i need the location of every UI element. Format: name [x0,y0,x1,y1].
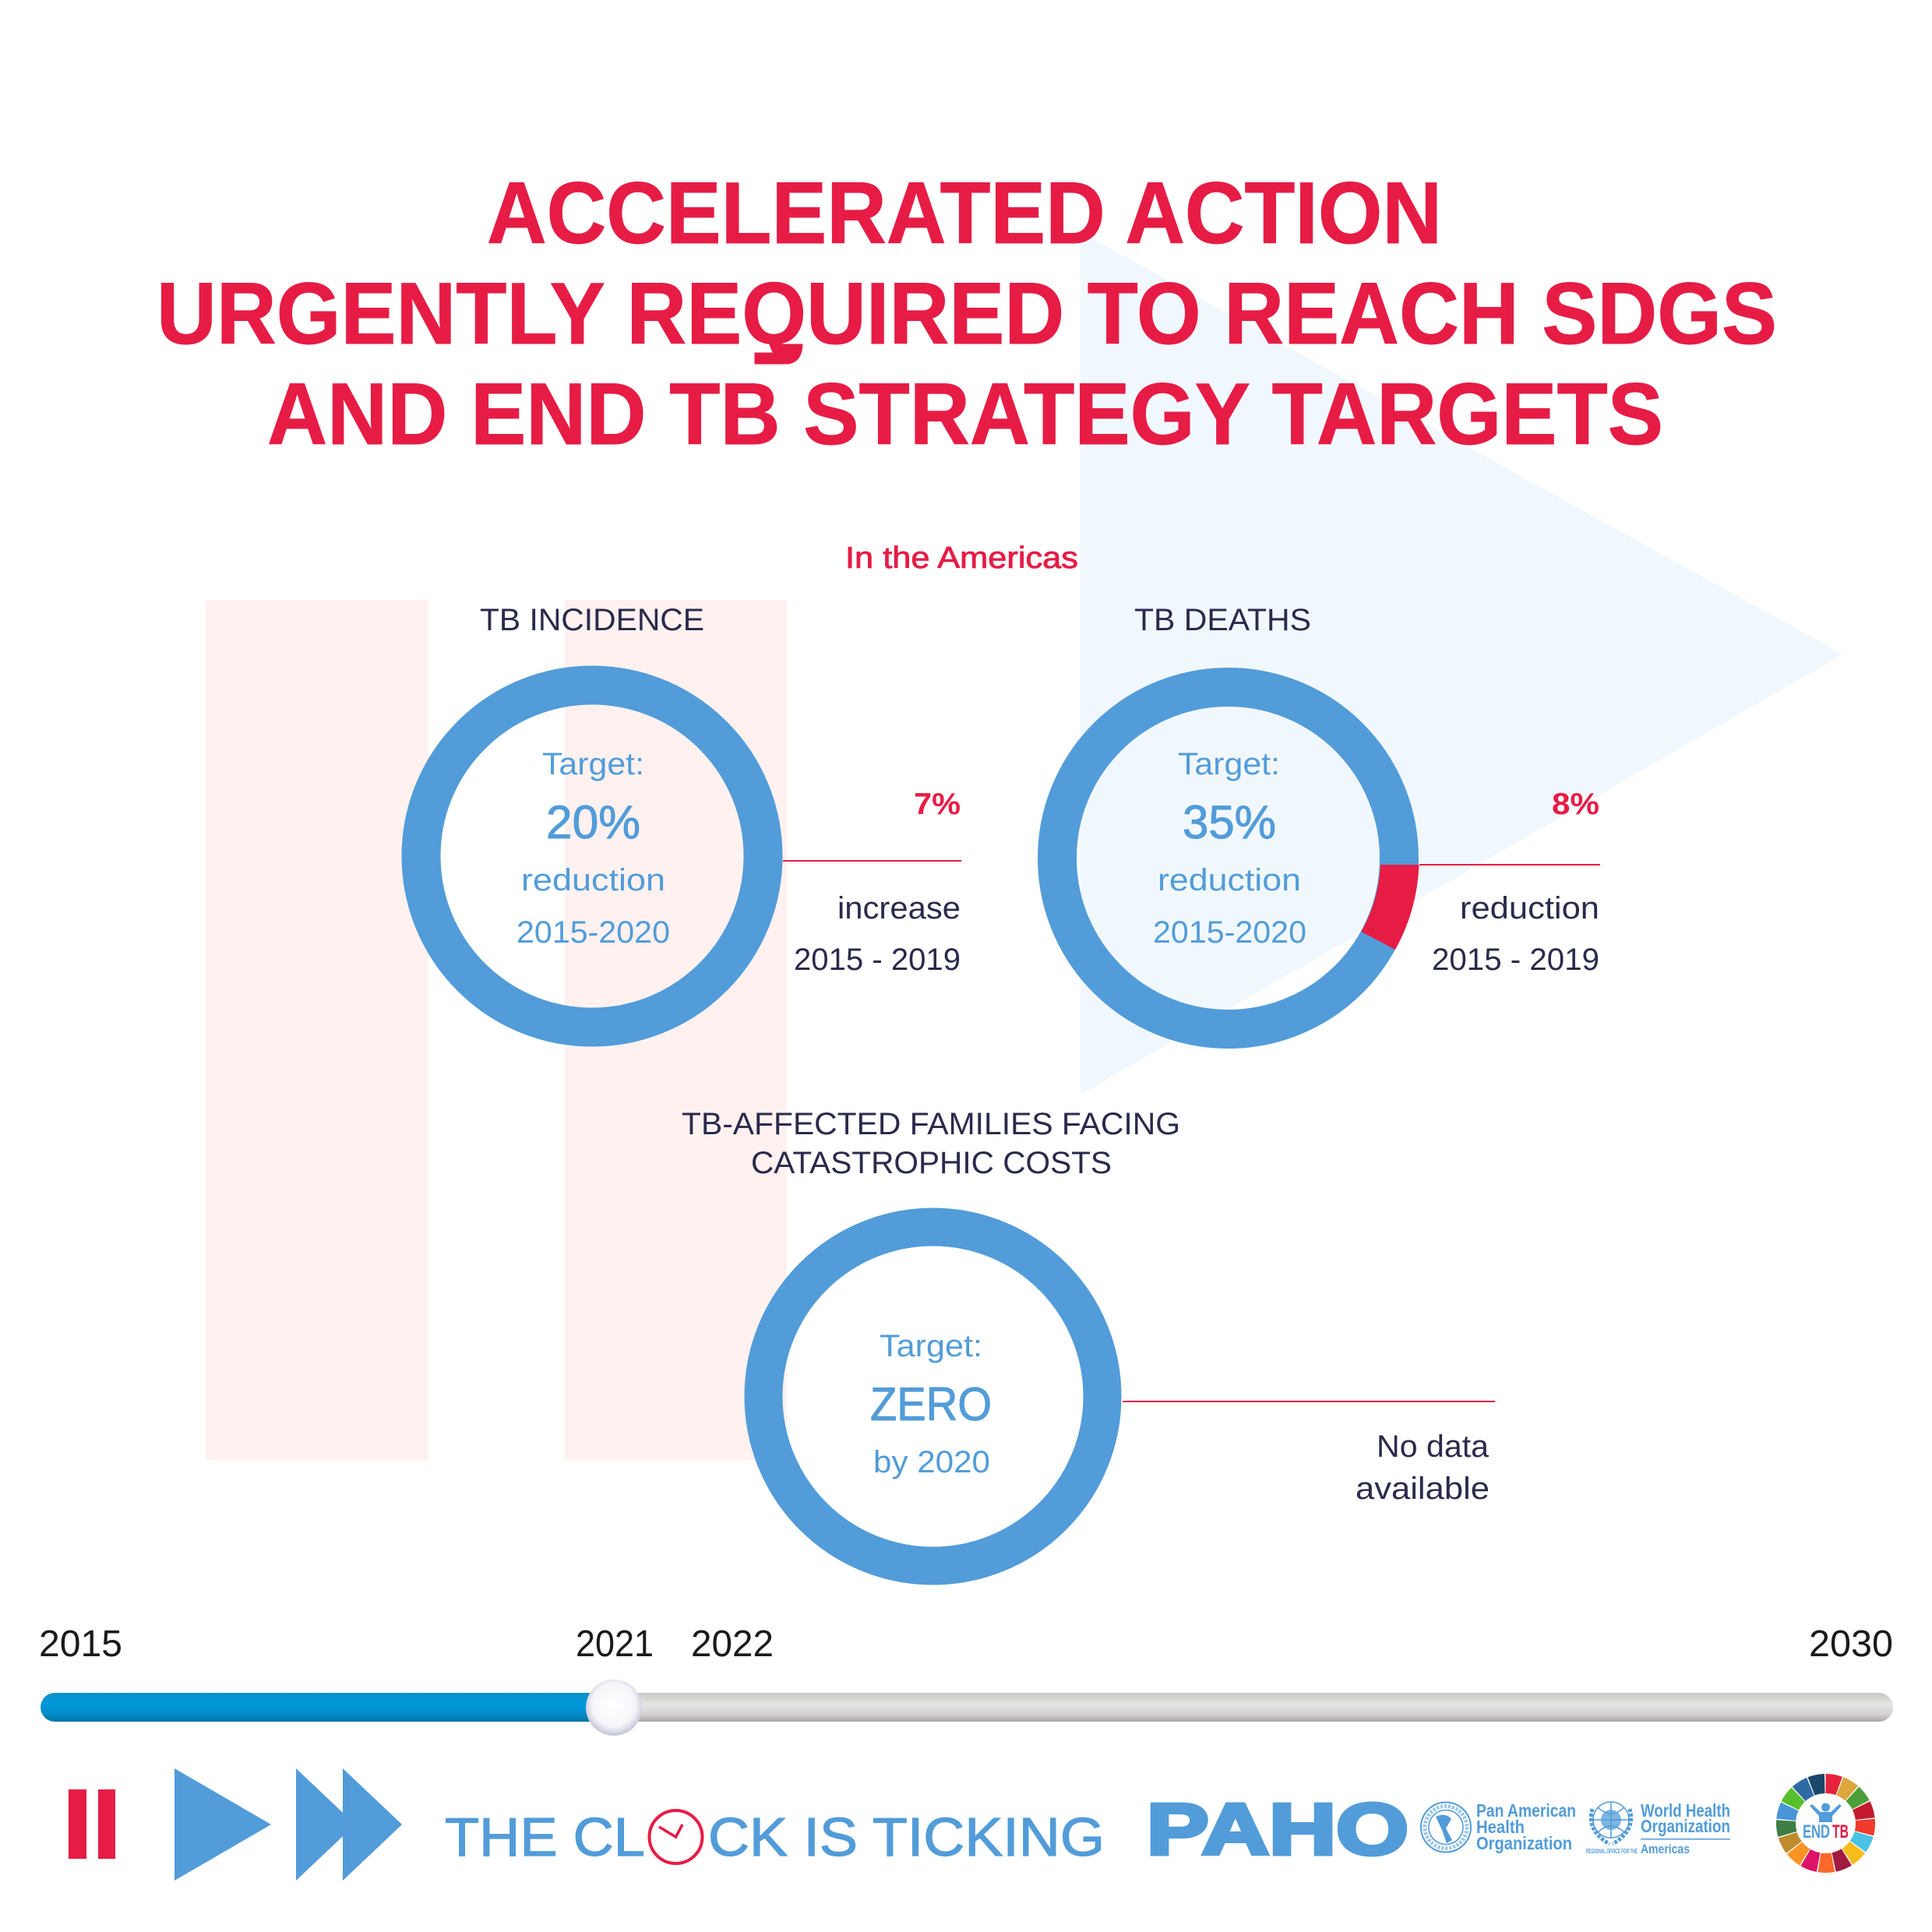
logo: PAHO emblem [1421,1803,1471,1853]
logo text: Pan American Health Organization: Organization [1476,1833,1572,1853]
target text: zero by 2020: by 2020 [873,1445,990,1479]
callout value: 8% reduction: 8% [1552,788,1599,821]
donut segment: 8% achieved [1361,865,1419,950]
logo: End TB wheel [1769,1767,1882,1880]
slogan: the clock is ticking: CK IS TICKING [708,1807,1105,1867]
callout value: 7% increase: increase [837,891,961,925]
target text: zero by 2020 [870,1329,992,1479]
target text: 20% reduction: reduction [521,863,665,897]
callout line: incidence [783,860,961,862]
target text: 35% reduction: Target: [1178,747,1280,781]
panel: TB deaths [1057,603,1600,1029]
heading: TB-affected families [682,1107,1180,1180]
callout line: costs [1123,1401,1495,1402]
callout value: 8% reduction: reduction [1460,891,1599,925]
target text: 35% reduction: 35% [1183,796,1276,848]
panel: catastrophic costs [682,1107,1495,1566]
icon: play [175,1768,271,1881]
target text: 35% reduction [1153,747,1306,950]
callout text: no data available: No data [1377,1430,1490,1464]
wordmark: END TB: TB [1832,1821,1849,1842]
callout value: 7% increase: 7% [914,788,961,821]
panel: TB incidence [421,603,961,1027]
title: URGENTLY REQUIRED TO REACH SDGS [157,265,1777,362]
logo text: World Health Organization Americas: REGIONAL OFFICE FOR THE [1586,1848,1638,1855]
background play triangle [1081,232,1842,1095]
wordmark: END TB: END [1803,1821,1830,1842]
logo text: World Health Organization Americas [1586,1800,1730,1856]
icon: clock [650,1810,703,1863]
callout value: 7% increase [794,788,961,977]
timeline year labels: 2022 [691,1624,774,1665]
subtitle: in the Americas: In the Americas [845,541,1078,575]
target text: 20% reduction: Target: [542,747,644,781]
logo: WHO emblem [1591,1802,1631,1844]
logo text: World Health Organization Americas: Americas [1641,1842,1690,1856]
heading: TB incidence: TB INCIDENCE [480,603,704,637]
callout line: deaths [1419,864,1600,866]
donut: catastrophic costs target [763,1227,1102,1566]
timeline year labels [39,1624,1893,1665]
callout value: 8% reduction [1432,788,1599,977]
heading: TB-affected families: CATASTROPHIC COSTS [751,1146,1112,1180]
donut: TB deaths target [1057,687,1399,1029]
target text: 20% reduction: 20% [546,796,640,848]
logo text: World Health Organization Americas: Organization [1641,1816,1730,1836]
slogan: the clock is ticking: THE CL [445,1807,645,1867]
timeline year labels: 2021 [576,1624,654,1665]
donut: TB incidence target [421,686,763,1027]
logo text: Pan American Health Organization: Pan American [1476,1800,1576,1821]
background pause bars [206,600,787,1460]
target text: zero by 2020: ZERO [870,1378,992,1430]
callout value: 8% reduction: 2015 - 2019 [1432,943,1599,977]
slogan: the clock is ticking [445,1807,1105,1867]
timeline year labels: 2015 [39,1624,122,1665]
logo text: World Health Organization Americas: World Health [1641,1800,1730,1821]
icon: pause [69,1789,115,1859]
title [157,164,1777,463]
target text: 20% reduction: 2015-2020 [516,915,670,950]
timeline year labels: 2030 [1809,1624,1893,1665]
logo text: Pan American Health Organization [1476,1800,1576,1853]
icon: fast forward [296,1768,402,1881]
target text: 20% reduction [516,747,670,950]
target text: 35% reduction: 2015-2020 [1153,915,1306,950]
timeline slider [41,1680,1893,1736]
target text: 35% reduction: reduction [1158,863,1301,897]
title: ACCELERATED ACTION [487,164,1442,262]
logo: PAHO wordmark: PAHO [1147,1789,1408,1870]
heading: TB deaths: TB DEATHS [1134,603,1311,637]
logo text: Pan American Health Organization: Health [1476,1817,1525,1837]
callout text: no data available [1356,1430,1490,1506]
target text: zero by 2020: Target: [880,1329,982,1363]
title: AND END TB STRATEGY TARGETS [267,365,1663,463]
callout text: no data available: available [1356,1472,1490,1506]
callout value: 7% increase: 2015 - 2019 [794,943,961,977]
heading: TB-affected families: TB-AFFECTED FAMILIES FACING [682,1107,1180,1141]
icon: person with raised arms [1810,1803,1842,1822]
